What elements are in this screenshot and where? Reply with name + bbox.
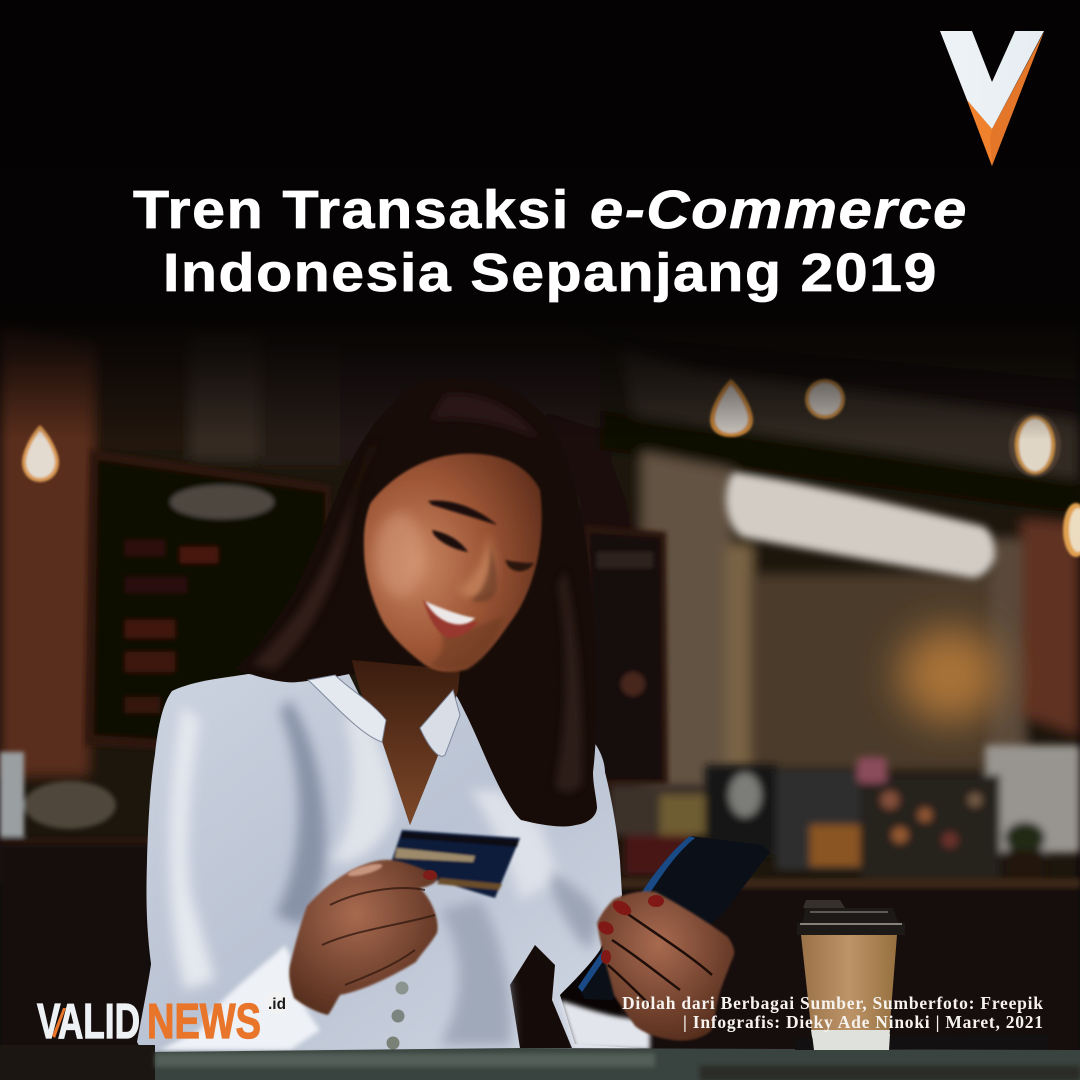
neck and chest (352, 660, 460, 825)
title (133, 180, 968, 303)
ceiling beam (600, 410, 1080, 515)
shirt (137, 674, 650, 1065)
logo: V mark (940, 31, 1044, 166)
brick wall right (1022, 520, 1080, 735)
jaw shadow (430, 615, 505, 670)
id badge (265, 992, 289, 1014)
upper right wall (620, 345, 1080, 500)
title line 1 italic: e-Commerce (590, 180, 968, 240)
wordmark VALID: VALID (37, 995, 140, 1049)
red nails (596, 895, 664, 964)
face (364, 454, 542, 672)
credit line 2: | Infografis: Dieky Ade Ninoki | Maret, 2021 (683, 1012, 1043, 1032)
shelf objects (610, 745, 1080, 885)
id badge: .id (268, 996, 286, 1013)
coffee cup (797, 900, 905, 1050)
right hand with phone (596, 891, 734, 1041)
brick wall left (0, 330, 95, 775)
table top (0, 1034, 1080, 1080)
hanging bulb edge (1063, 503, 1080, 557)
right wall column (642, 452, 732, 790)
top dark fade (0, 0, 1080, 440)
smile lips (423, 600, 478, 638)
cheek highlight (376, 513, 424, 597)
left eye (432, 530, 468, 552)
woman (137, 378, 770, 1065)
window area (750, 575, 1022, 770)
logo: ValidNews.id (37, 992, 289, 1049)
hanging bulb centre (710, 379, 753, 437)
smile teeth (425, 601, 475, 624)
chalkboard left (85, 450, 330, 760)
shirt buttons (386, 982, 408, 1050)
left counter items (0, 752, 150, 846)
nose shadow (470, 540, 497, 602)
hanging bulb right (1009, 413, 1061, 477)
hair (235, 378, 597, 826)
counter (0, 845, 1080, 1053)
collar (308, 675, 460, 756)
air conditioner (726, 472, 995, 578)
wordmark NEWS: NEWS (147, 995, 261, 1049)
chalkboard right (585, 525, 668, 790)
title line 1 roman: Tren Transaksi (133, 180, 570, 240)
wall glow (898, 627, 1002, 723)
credit line 1: Diolah dari Berbagai Sumber, Sumberfoto: Freepik (622, 993, 1043, 1013)
right eye (505, 560, 534, 571)
hanging bulb far left (22, 425, 59, 482)
left eyebrow (428, 500, 497, 525)
thumb highlight (347, 861, 383, 879)
credit card (390, 830, 520, 898)
left hand with card (289, 860, 438, 1015)
nose (458, 535, 496, 599)
smartphone (578, 836, 770, 1000)
nail (423, 870, 437, 880)
hanging bulb centre right (805, 379, 845, 419)
V accent (52, 1008, 66, 1038)
title line 2: Indonesia Sepanjang 2019 (163, 243, 938, 303)
source credit (622, 993, 1043, 1032)
